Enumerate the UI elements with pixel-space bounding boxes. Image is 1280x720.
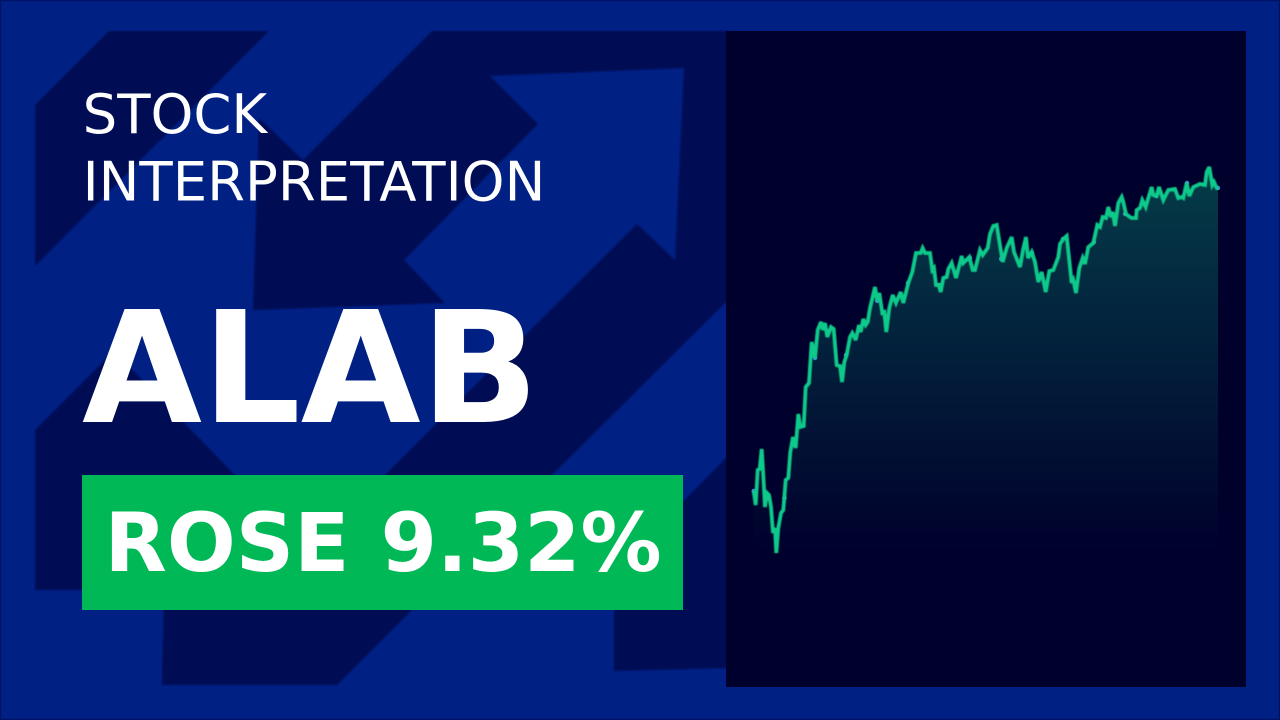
title bbox=[83, 82, 545, 214]
price line bbox=[754, 167, 1218, 553]
area fill bbox=[754, 167, 1218, 560]
background arrows bbox=[35, 31, 728, 685]
change badge bbox=[82, 475, 683, 610]
ticker: ALAB bbox=[82, 278, 539, 459]
change badge: ROSE 9.32% bbox=[104, 497, 662, 591]
chart panel bbox=[726, 31, 1246, 687]
title: INTERPRETATION bbox=[83, 150, 545, 214]
title: STOCK bbox=[83, 82, 268, 146]
data point markers bbox=[752, 181, 1220, 500]
